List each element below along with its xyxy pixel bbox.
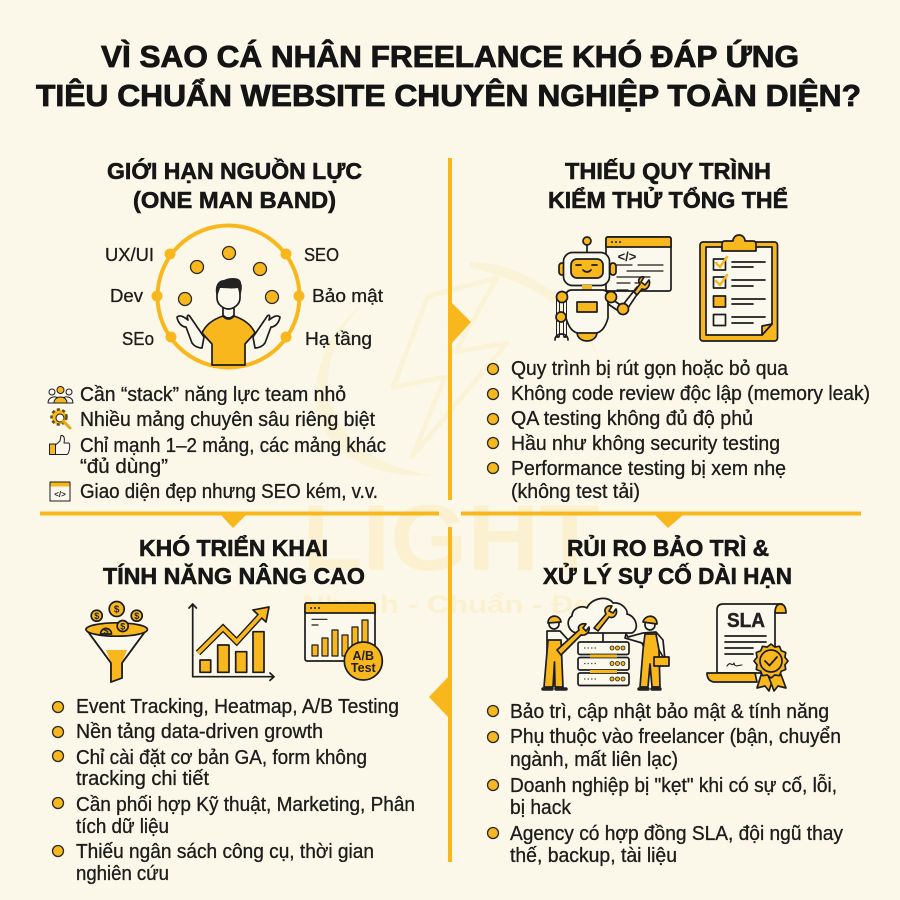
text: chỉ mạnh 1-2 mảng: “đủ dùng” (80, 456, 168, 478)
icon: funnel with coins: $ (120, 621, 125, 631)
panel: rủi ro bảo trì (488, 533, 843, 867)
heading: giới hạn nguồn lực: (ONE MAN BAND) (133, 187, 336, 213)
skill labels: Hạ tầng (305, 328, 372, 349)
icon: SLA certificate: SLA (727, 610, 765, 632)
heading: giới hạn nguồn lực (107, 157, 362, 213)
text: cần stack năng lực: Cần “stack” năng lực team nhỏ (80, 384, 346, 406)
list: quy trình bullets: Hầu như không security testing (511, 433, 780, 455)
panel: khó triển khai tính năng nâng cao (52, 534, 415, 885)
list: tính năng nâng cao bullets: Thiếu ngân sách công cụ, thời gian (76, 841, 374, 863)
watermark: LIGHT logo (302, 262, 610, 619)
list: quy trình bullets: Performance testing bị xem nhẹ (511, 458, 786, 480)
main title: VÌ SAO CÁ NHÂN FREELANCE KHÓ ĐÁP ỨNG (101, 38, 799, 74)
heading: khó triển khai (103, 534, 365, 589)
heading: thiếu quy trình: THIẾU QUY TRÌNH (565, 157, 771, 184)
list: quy trình bullets (488, 358, 870, 503)
heading: rủi ro bảo trì: RỦI RO BẢO TRÌ & (567, 533, 769, 561)
icon: team (48, 386, 73, 403)
list: tính năng nâng cao bullets: Nền tảng data-driven growth (76, 721, 323, 743)
icon: funnel with coins: $ (134, 611, 139, 621)
list: rủi ro bullets: Doanh nghiệp bị "kẹt" khi có sự cố, lỗi, (510, 774, 837, 797)
list: tính năng nâng cao bullets: tích dữ liệu (76, 816, 169, 838)
heading: rủi ro bảo trì (543, 533, 792, 589)
main title (36, 38, 861, 113)
list: rủi ro bullets: Phụ thuộc vào freelancer (bận, chuyển (510, 726, 841, 748)
list: quy trình bullets: Không code review độc lập (memory leak) (511, 383, 870, 405)
list: quy trình bullets: (không test tải) (511, 481, 640, 503)
list: tính năng nâng cao bullets: nghiên cứu (76, 863, 169, 885)
heading: giới hạn nguồn lực: GIỚI HẠN NGUỒN LỰC (107, 157, 362, 184)
text: nhiều mảng chuyên sâu: Nhiều mảng chuyên sâu riêng biệt (80, 409, 375, 431)
list: rủi ro bullets: Agency có hợp đồng SLA, đội ngũ thay (510, 823, 843, 845)
skill labels (105, 244, 383, 349)
icon: robot with code window (555, 237, 671, 341)
icon: funnel with coins (86, 602, 147, 682)
icon: SLA certificate (707, 604, 788, 691)
icon: checklist clipboard (700, 235, 778, 341)
heading: khó triển khai: TÍNH NĂNG NÂNG CAO (103, 562, 365, 589)
heading: khó triển khai: KHÓ TRIỂN KHAI (139, 534, 328, 561)
icon: gear and magnifier (52, 410, 70, 428)
right worker (625, 616, 669, 689)
icon: A/B test dashboard: A/B (353, 649, 374, 663)
heading: rủi ro bảo trì: XỬ LÝ SỰ CỐ DÀI HẠN (543, 561, 792, 589)
left worker (543, 616, 570, 689)
list: tính năng nâng cao bullets (52, 696, 415, 885)
quadrant dividers with pointers (40, 158, 861, 862)
list: rủi ro bullets: Bảo trì, cập nhật bảo mật & tính năng (510, 701, 829, 723)
heading: thiếu quy trình (548, 157, 788, 213)
panel: one man band (48, 157, 386, 503)
text: chỉ mạnh 1-2 mảng (80, 435, 386, 478)
skill labels: Dev (110, 285, 144, 306)
list: quy trình bullets: QA testing không đủ độ phủ (511, 408, 753, 430)
list: rủi ro bullets (488, 701, 843, 867)
icon: A/B test dashboard (305, 603, 382, 680)
list: tính năng nâng cao bullets: tracking chi tiết (76, 768, 209, 790)
list: tính năng nâng cao bullets: Chỉ cài đặt cơ bản GA, form không (76, 747, 367, 769)
icon: funnel with coins: $ (94, 611, 99, 621)
heading: thiếu quy trình: KIỂM THỬ TỔNG THỂ (548, 185, 788, 213)
icon: code window (50, 482, 70, 501)
list: tính năng nâng cao bullets: Event Tracking, Heatmap, A/B Testing (76, 696, 399, 718)
big yellow wrench (557, 624, 589, 655)
text: chỉ mạnh 1-2 mảng: Chỉ mạnh 1–2 mảng, các mảng khác (80, 435, 386, 457)
watermark: LIGHT logo: Nhanh - Chuẩn - Đẹp (302, 591, 610, 619)
chart icon: rising bars and trend arrow (189, 604, 274, 680)
icon: code window: </> (54, 490, 66, 499)
skill labels: UX/UI (105, 244, 154, 265)
skill labels: Bảo mật (312, 285, 383, 306)
list: rủi ro bullets: ngành, mất liên lạc) (510, 749, 678, 771)
skill labels: SEO (304, 244, 339, 265)
text: giao diện đẹp: Giao diện đẹp nhưng SEO kém, v.v. (80, 481, 378, 503)
list: tính năng nâng cao bullets: Cần phối hợp Kỹ thuật, Marketing, Phân (76, 794, 415, 816)
skill labels: SEo (122, 328, 154, 349)
icon: juggling person in circle (152, 226, 304, 368)
icon: funnel with coins: $ (114, 604, 120, 616)
list: rủi ro bullets: bị hack (510, 797, 572, 819)
icon: robot with code window: </> (618, 249, 637, 264)
icon: thumbs up (50, 435, 70, 454)
panel: thiếu quy trình kiểm thử (488, 157, 870, 503)
list: quy trình bullets: Quy trình bị rút gọn hoặc bỏ qua (511, 358, 789, 380)
icon: A/B test dashboard: Test (351, 661, 377, 675)
watermark: LIGHT logo: LIGHT (302, 485, 600, 590)
icon: engineers fixing cloud server (543, 598, 669, 689)
list: rủi ro bullets: thế, backup, tài liệu (510, 845, 677, 867)
main title: TIÊU CHUẨN WEBSITE CHUYÊN NGHIỆP TOÀN DIỆN? (36, 77, 861, 113)
icon: funnel with coins: $ (103, 626, 109, 636)
